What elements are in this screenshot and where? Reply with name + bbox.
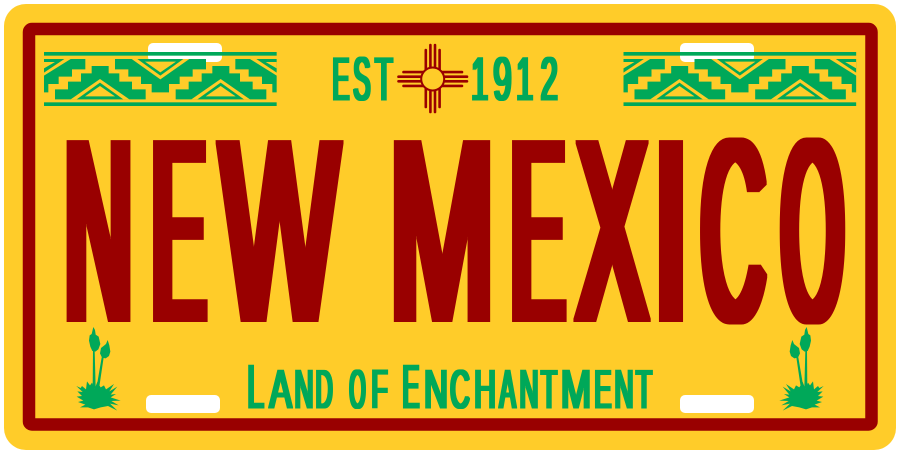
mounting hole top right [680, 43, 754, 62]
mounting hole bottom left [146, 395, 220, 413]
mounting hole bottom right [680, 395, 754, 413]
icon: yucca plant left [76, 327, 121, 411]
slogan: F [371, 358, 388, 420]
decorative pattern band right [623, 52, 856, 106]
main title: M [390, 86, 494, 376]
slogan: O [350, 358, 366, 420]
established year text: E [332, 45, 349, 113]
slogan: M [561, 358, 591, 420]
slogan: N [424, 358, 448, 420]
decorative pattern band left [44, 52, 277, 106]
slogan: C [450, 358, 470, 420]
icon: yucca plant right [779, 327, 824, 411]
main title: N [65, 86, 132, 376]
icon: Zia sun symbol [398, 45, 467, 112]
established year text: 1 [471, 45, 488, 113]
established year text: S [353, 45, 370, 113]
established year text: 2 [541, 45, 558, 113]
main title: E [512, 86, 564, 376]
main title: C [702, 86, 765, 376]
slogan: N [520, 358, 538, 420]
established year text: T [375, 45, 392, 113]
slogan: L [247, 353, 264, 422]
main title: W [221, 86, 339, 376]
slogan: E [402, 353, 419, 422]
slogan: N [294, 358, 314, 420]
main title: E [153, 86, 205, 376]
slogan: H [474, 358, 496, 420]
license plate infographic: T [636, 358, 652, 420]
main title: I [653, 86, 689, 376]
slogan: A [500, 358, 516, 420]
established year text: 9 [493, 45, 512, 113]
mounting hole top left [148, 43, 222, 62]
slogan: E [594, 358, 611, 420]
slogan: N [614, 358, 634, 420]
main title: X [577, 86, 647, 376]
slogan: A [270, 358, 292, 420]
established year text: 1 [516, 45, 533, 113]
slogan: T [541, 358, 557, 420]
slogan: D [316, 358, 333, 420]
